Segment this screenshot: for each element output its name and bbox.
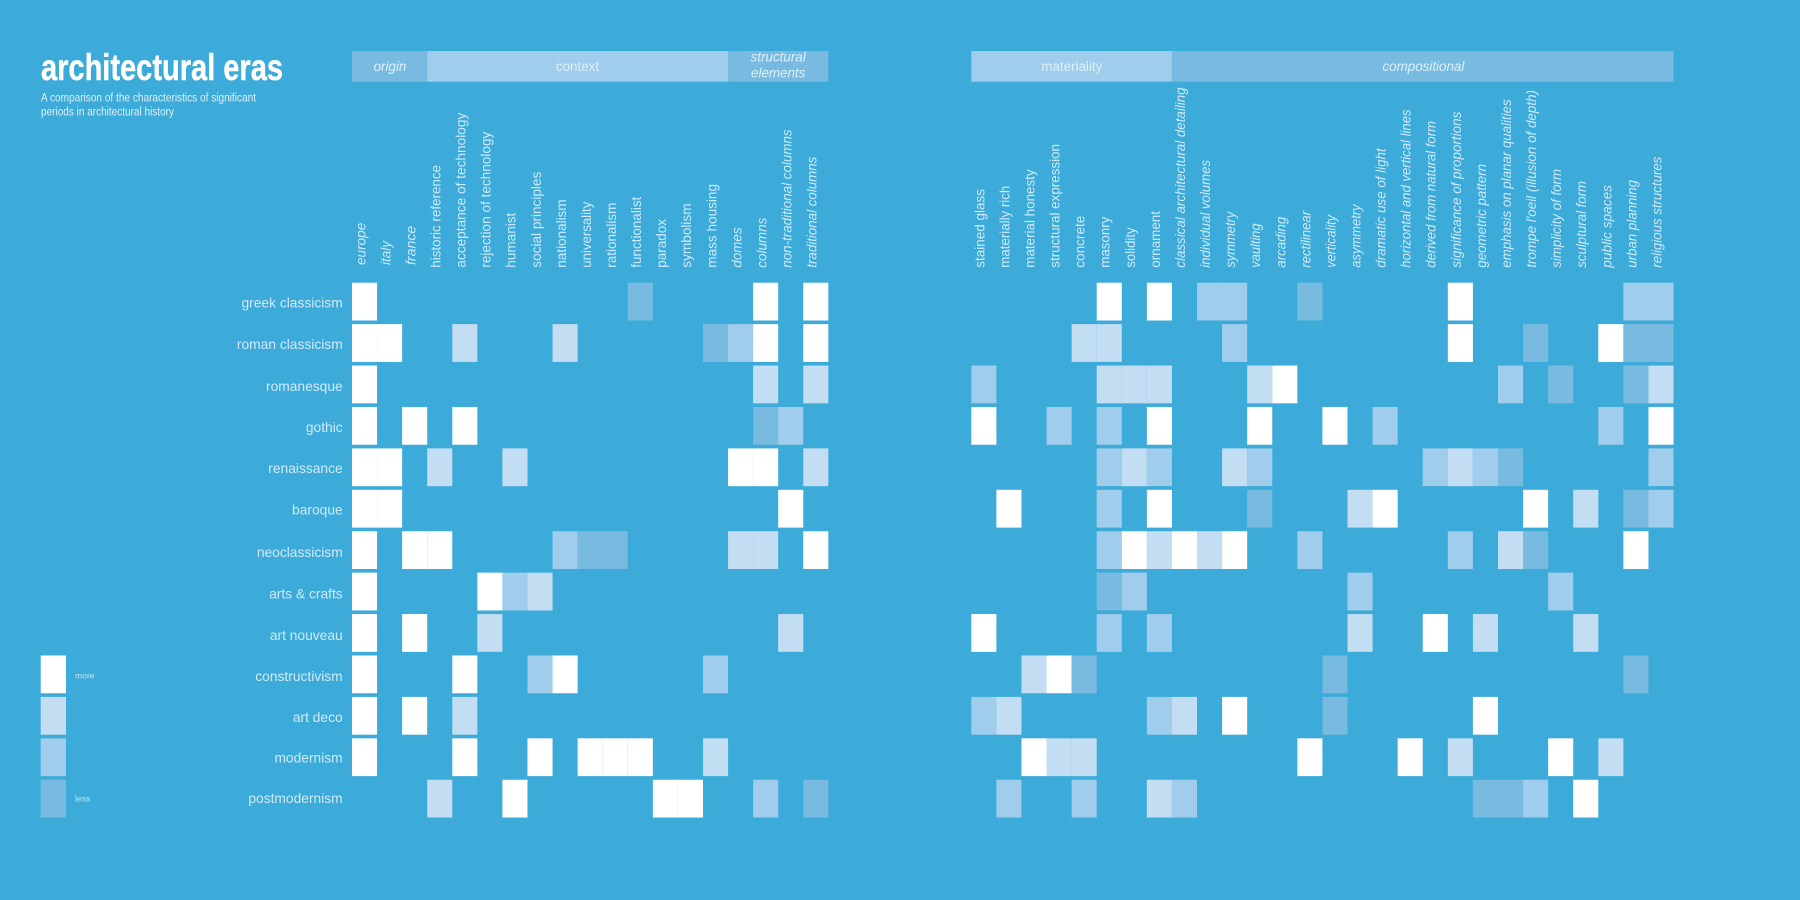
- subtitle text block: [41, 91, 256, 118]
- right column labels: solidity: [1123, 227, 1138, 268]
- left matrix: origin, context, structural elements: [352, 283, 828, 818]
- row: roman classicism: [352, 324, 828, 362]
- category: structural elements: [728, 49, 828, 82]
- left column labels: acceptance of technology: [454, 112, 469, 268]
- left column labels: europe: [353, 223, 368, 265]
- left column labels: nationalism: [554, 199, 569, 268]
- right column labels: urban planning: [1624, 180, 1639, 268]
- legend: [41, 655, 95, 818]
- right column labels: classical architectural detailing: [1173, 87, 1188, 268]
- row: art deco: [971, 697, 1498, 735]
- right column labels: [972, 87, 1664, 269]
- era row labels: baroque: [292, 503, 343, 518]
- category: origin: origin: [374, 59, 406, 74]
- left column labels: traditional columns: [805, 156, 820, 268]
- right category header bar: [971, 51, 1674, 82]
- category: structural elements: structural: [751, 49, 807, 64]
- row: renaissance: [1097, 448, 1674, 486]
- subtitle text block: periods in architectural history: [41, 104, 175, 118]
- left column labels: humanist: [504, 212, 519, 268]
- left column labels: functionalist: [629, 196, 644, 268]
- era row labels: gothic: [306, 420, 343, 435]
- left column labels: mass housing: [704, 184, 719, 268]
- row: renaissance: [352, 448, 828, 486]
- left column labels: france: [403, 226, 418, 265]
- category: structural elements: elements: [751, 66, 806, 81]
- right column labels: vaulting: [1248, 223, 1263, 268]
- category: compositional: [1172, 51, 1674, 82]
- era row labels: greek classicism: [241, 295, 343, 310]
- row: postmodernism: [427, 780, 828, 818]
- left column labels: rationalism: [604, 203, 619, 268]
- right matrix: materiality, compositional: [971, 283, 1674, 818]
- right column labels: stained glass: [972, 189, 987, 268]
- right column labels: simplicity of form: [1549, 169, 1564, 268]
- legend: more: [75, 670, 95, 680]
- era row labels: constructivism: [255, 669, 343, 684]
- row: greek classicism: [352, 283, 828, 320]
- legend: less: [75, 793, 90, 803]
- era row labels: renaissance: [268, 461, 343, 476]
- right column labels: symmetry: [1223, 211, 1238, 268]
- row: gothic: [971, 407, 1674, 445]
- row: postmodernism: [996, 780, 1598, 818]
- right column labels: sculptural form: [1574, 181, 1589, 268]
- left column labels: symbolism: [679, 203, 694, 268]
- right column labels: verticality: [1323, 214, 1338, 268]
- left column labels: italy: [378, 240, 393, 265]
- row: greek classicism: [1097, 283, 1674, 320]
- right column labels: trompe l'oeil (illusion of depth): [1524, 90, 1539, 268]
- row: baroque: [996, 490, 1674, 528]
- left category header bar: [352, 49, 828, 82]
- era row labels: roman classicism: [237, 337, 343, 352]
- category: context: [427, 51, 728, 82]
- category: compositional: compositional: [1382, 59, 1465, 74]
- right column labels: individual volumes: [1198, 160, 1213, 268]
- right column labels: dramatic use of light: [1374, 147, 1389, 268]
- era row labels: art nouveau: [270, 628, 343, 643]
- right column labels: geometric pattern: [1474, 164, 1489, 268]
- left column labels: social principles: [529, 171, 544, 268]
- row: art nouveau: [971, 614, 1598, 652]
- subtitle text block: A comparison of the characteristics of significant: [41, 91, 256, 105]
- left column labels: non-traditional columns: [780, 129, 794, 268]
- row: baroque: [352, 490, 803, 528]
- era row labels: modernism: [274, 751, 343, 766]
- left column labels: [353, 112, 820, 268]
- right column labels: materially rich: [997, 186, 1012, 268]
- era row labels: art deco: [293, 710, 343, 725]
- row: neoclassicism: [352, 531, 828, 569]
- right column labels: concrete: [1073, 216, 1088, 268]
- right column labels: asymmetry: [1348, 203, 1364, 268]
- left column labels: historic reference: [428, 165, 444, 268]
- left column labels: domes: [729, 227, 744, 268]
- row: arts & crafts: [1097, 573, 1573, 610]
- era row labels: arts & crafts: [269, 586, 343, 601]
- row: neoclassicism: [1097, 531, 1648, 569]
- era row labels: [237, 295, 343, 806]
- left column labels: columns: [754, 217, 769, 268]
- row: modernism: [1021, 738, 1623, 776]
- category: materiality: materiality: [1041, 59, 1103, 74]
- era row labels: neoclassicism: [257, 545, 343, 560]
- era row labels: postmodernism: [248, 791, 343, 806]
- right column labels: rectilinear: [1298, 211, 1313, 268]
- row: modernism: [352, 738, 728, 776]
- right column labels: material honesty: [1022, 169, 1038, 268]
- left column labels: universality: [579, 201, 594, 268]
- right column labels: derived from natural form: [1424, 121, 1439, 268]
- row: art nouveau: [352, 614, 803, 652]
- era row labels: romanesque: [266, 379, 343, 394]
- row: romanesque: [352, 366, 828, 403]
- row: roman classicism: [1072, 324, 1674, 362]
- row: constructivism: [1021, 655, 1648, 693]
- row: art deco: [352, 697, 477, 735]
- right column labels: structural expression: [1048, 144, 1062, 268]
- left column labels: paradox: [654, 219, 669, 268]
- category: context: context: [556, 59, 599, 74]
- right column labels: masonry: [1098, 216, 1113, 268]
- row: romanesque: [971, 366, 1674, 403]
- category: materiality: [971, 51, 1172, 82]
- row: arts & crafts: [352, 573, 553, 610]
- right column labels: horizontal and vertical lines: [1399, 109, 1414, 268]
- right column labels: public spaces: [1599, 185, 1614, 269]
- right column labels: significance of proportions: [1449, 111, 1464, 268]
- right column labels: religious structures: [1650, 156, 1664, 268]
- row: gothic: [352, 407, 803, 445]
- category: origin: [352, 51, 427, 82]
- title: architectural eras: [41, 47, 283, 88]
- right column labels: ornament: [1148, 211, 1163, 268]
- left column labels: rejection of technology: [479, 131, 494, 268]
- right column labels: arcading: [1273, 216, 1288, 268]
- right column labels: emphasis on planar qualities: [1499, 99, 1514, 268]
- row: constructivism: [352, 655, 728, 693]
